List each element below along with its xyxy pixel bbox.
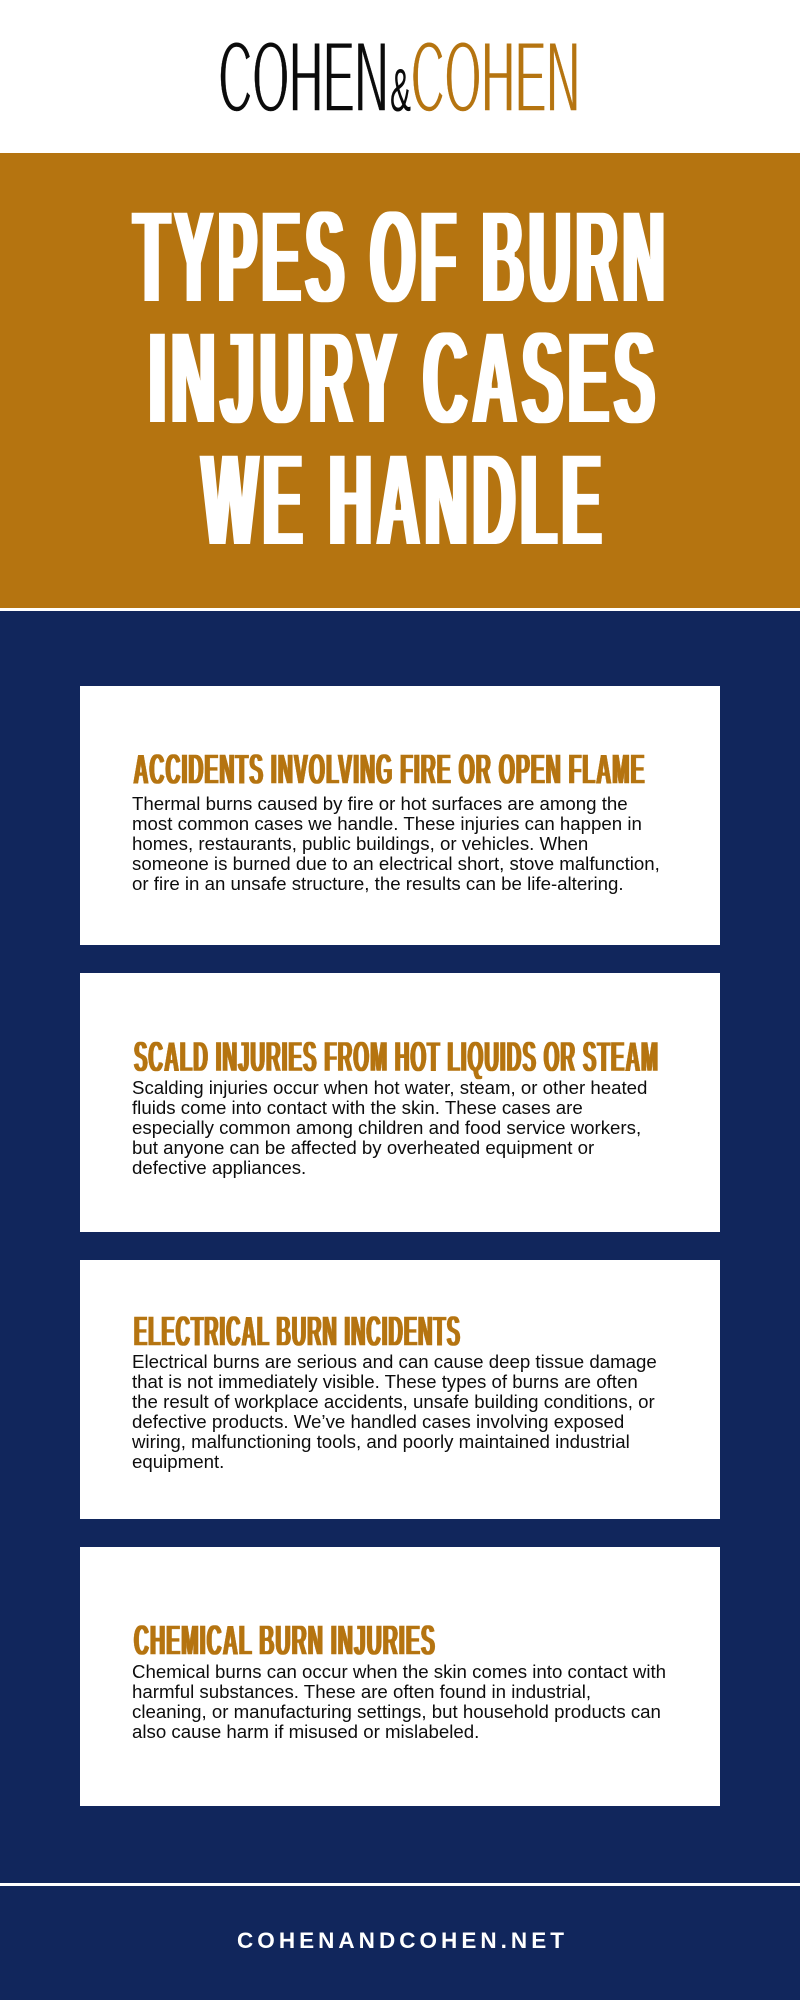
logo: Cohen & Cohen: & <box>390 57 411 124</box>
text: fire or open flame: someone is burned due to an electrical short, stove malfunction, <box>132 853 660 874</box>
panel: scald injuries <box>80 973 720 1232</box>
panel: fire or open flame <box>80 686 720 945</box>
text: chemical burns: harmful substances. These are often found in industrial, <box>132 1681 591 1702</box>
text: fire or open flame: or fire in an unsafe structure, the results can be life-altering. <box>132 873 624 894</box>
text: electrical burns: the result of workplace accidents, unsafe building conditions, or <box>132 1391 655 1412</box>
navy content section <box>0 611 800 1883</box>
text: fire or open flame: Thermal burns caused by fire or hot surfaces are among the <box>132 793 628 814</box>
text: electrical burns: that is not immediately visible. These types of burns are often <box>132 1371 638 1392</box>
text: chemical burns: Chemical burns can occur when the skin comes into contact with <box>132 1661 666 1682</box>
text: fire or open flame: most common cases we handle. These injuries can happen in <box>132 813 642 834</box>
text: scald injuries: especially common among children and food service workers, <box>132 1117 641 1138</box>
text: scald injuries: defective appliances. <box>132 1157 306 1178</box>
text: chemical burns <box>132 1661 666 1742</box>
text: chemical burns: cleaning, or manufacturing settings, but household products can <box>132 1701 661 1722</box>
text: electrical burns: Electrical burns are serious and can cause deep tissue damage <box>132 1351 657 1372</box>
panel: chemical burns: CHEMICAL BURN INJURIES <box>134 1617 436 1665</box>
footer <box>0 1886 800 2000</box>
text: fire or open flame <box>132 793 660 894</box>
text: chemical burns: also cause harm if misused or mislabeled. <box>132 1721 479 1742</box>
text: scald injuries: but anyone can be affected by overheated equipment or <box>132 1137 594 1158</box>
footer website: COHENANDCOHEN.NET <box>237 1928 564 1953</box>
title <box>134 183 670 575</box>
logo header: COHEN <box>411 20 580 134</box>
text: electrical burns: wiring, malfunctioning tools, and poorly maintained industrial <box>131 1431 630 1452</box>
title banner <box>0 153 800 608</box>
text: electrical burns: equipment. <box>132 1451 224 1472</box>
logo header <box>0 0 800 153</box>
text: scald injuries: Scalding injuries occur when hot water, steam, or other heated <box>132 1077 647 1098</box>
text: electrical burns: defective products. We’ve handled cases involving exposed <box>132 1411 624 1432</box>
text: electrical burns <box>131 1351 657 1472</box>
text: fire or open flame: homes, restaurants, public buildings, or vehicles. When <box>132 833 588 854</box>
panel: electrical burns <box>80 1260 720 1519</box>
panel: chemical burns <box>80 1547 720 1806</box>
text: scald injuries: fluids come into contact with the skin. These cases are <box>132 1097 583 1118</box>
text: scald injuries <box>132 1077 647 1178</box>
logo: Cohen & Cohen: COHEN <box>218 20 388 134</box>
